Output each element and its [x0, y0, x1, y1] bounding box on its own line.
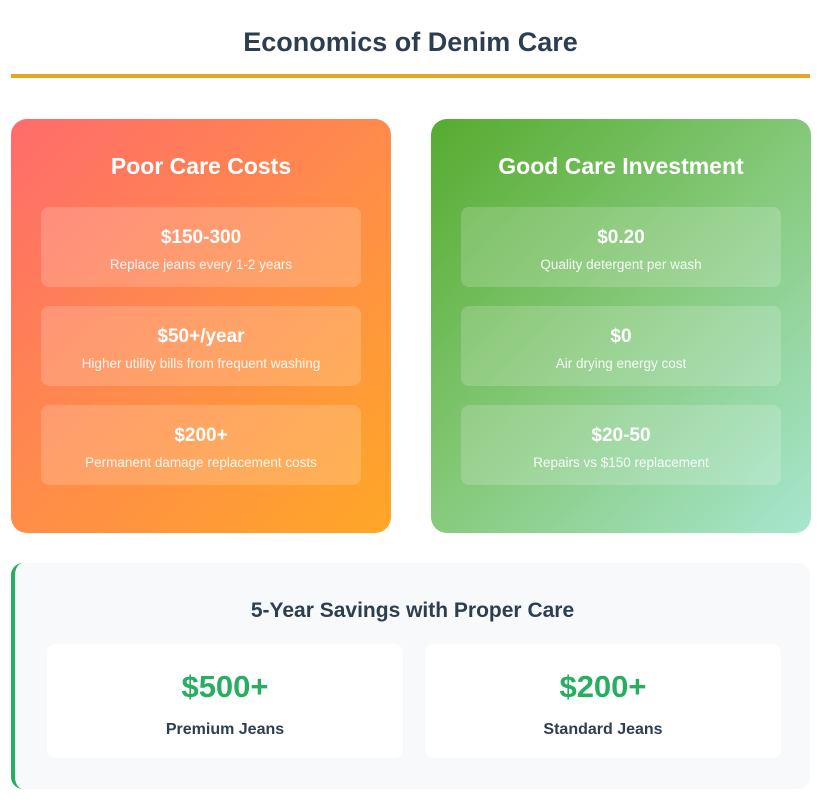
panel: 5-year savings	[11, 563, 810, 789]
card: premium jeans: Premium Jeans	[166, 721, 284, 738]
card: detergent	[461, 207, 781, 287]
card: repairs	[461, 405, 781, 485]
card: detergent: Quality detergent per wash	[540, 257, 702, 272]
card: detergent: $0.20	[597, 227, 645, 248]
card: air drying	[461, 306, 781, 386]
card: standard jeans: Standard Jeans	[543, 721, 663, 738]
card: air drying: Air drying energy cost	[556, 356, 686, 371]
heading: poor care: Poor Care Costs	[111, 153, 291, 179]
card: utility bills: Higher utility bills from frequent washing	[82, 356, 320, 371]
heading: good care: Good Care Investment	[498, 153, 744, 179]
card: repairs: $20-50	[591, 425, 651, 446]
card: standard jeans	[425, 644, 781, 758]
card: permanent damage: $200+	[174, 425, 228, 446]
panel: poor care costs	[11, 119, 391, 533]
card: replace jeans: Replace jeans every 1-2 years	[110, 257, 292, 272]
card: utility bills	[41, 306, 361, 386]
card: permanent damage	[41, 405, 361, 485]
card: standard jeans: $200+	[559, 669, 647, 704]
card: repairs: Repairs vs $150 replacement	[533, 455, 709, 470]
card: replace jeans: $150-300	[161, 227, 241, 248]
card: utility bills: $50+/year	[157, 326, 245, 347]
heading: savings: 5-Year Savings with Proper Care	[251, 599, 574, 622]
panel: good care investment	[431, 119, 811, 533]
card: premium jeans: $500+	[181, 669, 269, 704]
card: air drying: $0	[610, 326, 632, 347]
card: permanent damage: Permanent damage replacement costs	[85, 455, 317, 470]
card: premium jeans	[47, 644, 403, 758]
title: Economics of Denim Care	[243, 27, 578, 57]
card: replace jeans	[41, 207, 361, 287]
